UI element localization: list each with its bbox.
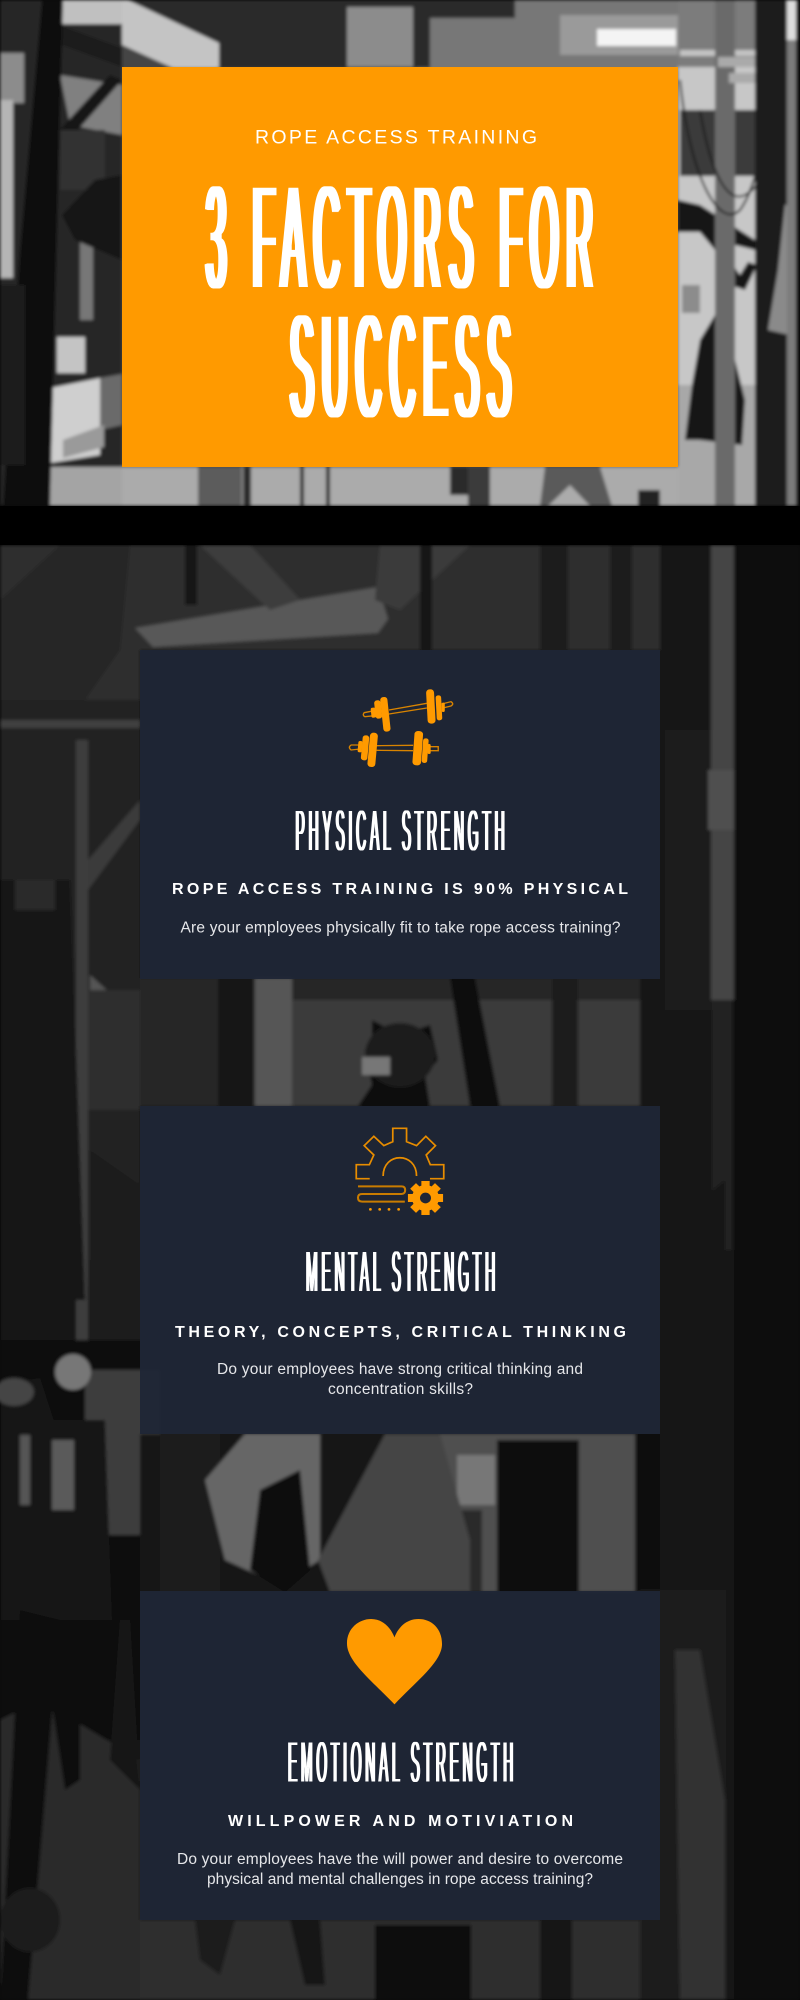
black divider band	[0, 506, 800, 545]
description: concentration skills?	[328, 1381, 473, 1398]
hero kicker: ROPE ACCESS TRAINING	[255, 126, 537, 148]
panel: physical strength	[140, 650, 660, 979]
lower photo background	[0, 545, 800, 2000]
description: physical and mental challenges in rope access training?	[207, 1871, 593, 1888]
subheading: THEORY, CONCEPTS, CRITICAL THINKING	[175, 1324, 626, 1341]
description	[177, 1851, 623, 1888]
description: Are your employees physically fit to take rope access training?	[180, 920, 621, 936]
description: Do your employees have the will power and desire to overcome	[177, 1851, 623, 1868]
icon: gears	[356, 1128, 444, 1215]
panel: emotional strength	[140, 1591, 660, 1920]
panel: mental strength	[140, 1106, 660, 1434]
main title	[206, 153, 601, 450]
icon: barbells	[349, 689, 453, 767]
hero orange title panel	[122, 67, 678, 467]
subheading: ROPE ACCESS TRAINING IS 90% PHYSICAL	[172, 881, 628, 898]
icon: heart	[347, 1619, 442, 1704]
description	[217, 1361, 583, 1398]
description: Do your employees have strong critical thinking and	[217, 1361, 583, 1378]
hero photo background	[0, 0, 800, 506]
subheading: WILLPOWER AND MOTIVIATION	[228, 1813, 573, 1830]
